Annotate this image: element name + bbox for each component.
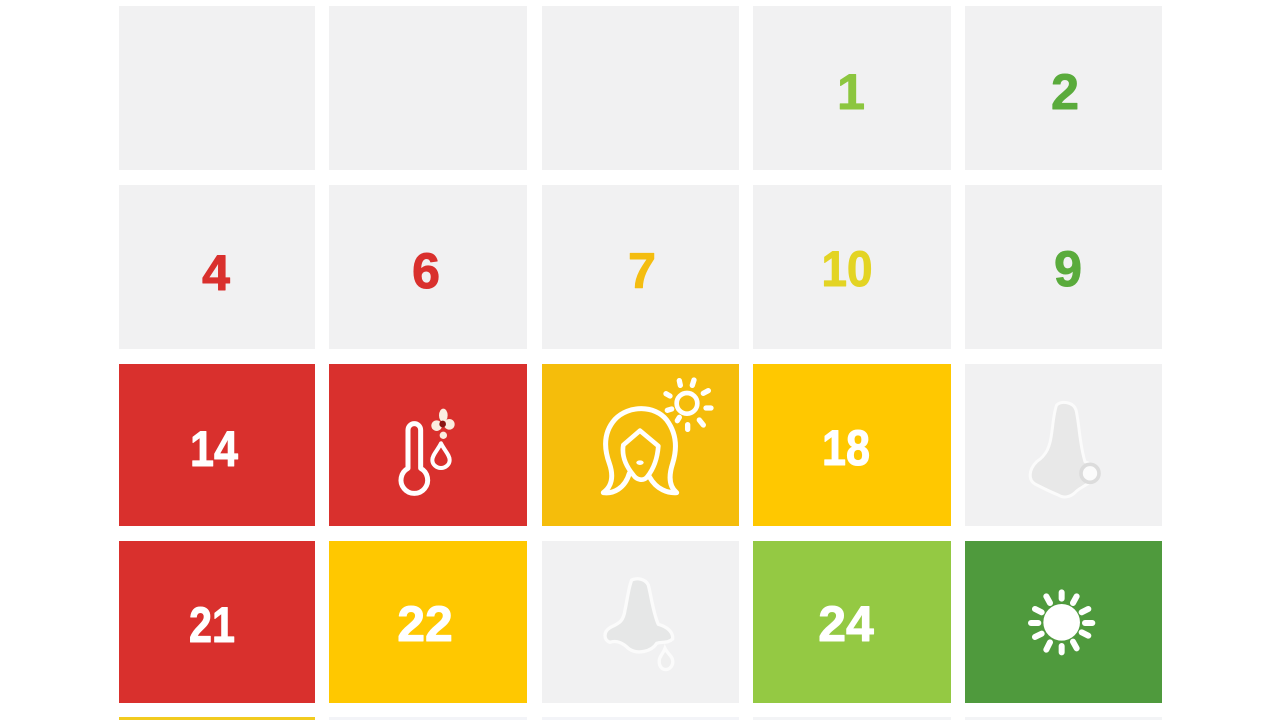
icon: runny nose <box>605 579 673 670</box>
day 14 cell: 14 <box>190 421 238 477</box>
day 10 cell: 10 <box>822 241 872 297</box>
cell: thermometer icon <box>329 364 527 526</box>
icon: nose with ring <box>1030 402 1099 497</box>
day 9 cell <box>965 185 1162 349</box>
icon: sun <box>1031 592 1092 652</box>
day 7 cell <box>542 185 739 349</box>
day 7 cell: 7 <box>628 243 656 299</box>
day 4 cell <box>119 185 315 349</box>
partial cell 4 <box>753 717 951 720</box>
day 21 cell: 21 <box>189 597 235 653</box>
day 6 cell: 6 <box>412 243 440 299</box>
partial cell 5 <box>965 717 1162 720</box>
calendar row 3 <box>119 364 1162 526</box>
partial cell 2 <box>329 717 527 720</box>
cell: sun icon <box>965 541 1162 703</box>
day 21 cell <box>119 541 315 703</box>
day 1 cell <box>753 6 951 170</box>
cell: nose drip icon <box>542 541 739 703</box>
calendar row 4 <box>119 541 1162 703</box>
day 10 cell <box>753 185 951 349</box>
empty cell 3 <box>542 6 739 170</box>
day 18 cell: 18 <box>822 420 870 476</box>
day 22 cell: 22 <box>397 596 453 652</box>
calendar row 1 <box>119 6 1162 170</box>
day 24 cell <box>753 541 951 703</box>
day 18 cell <box>753 364 951 526</box>
icon: woman with sun <box>603 380 711 493</box>
day 22 cell <box>329 541 527 703</box>
cell: nose icon <box>965 364 1162 526</box>
day 2 cell: 2 <box>1051 64 1079 120</box>
cell: woman and sun icon <box>542 364 739 526</box>
partial yellow cell <box>119 717 315 720</box>
empty cell 1 <box>119 6 315 170</box>
day 9 cell: 9 <box>1054 241 1082 297</box>
day 14 cell <box>119 364 315 526</box>
day 6 cell <box>329 185 527 349</box>
icon: thermometer and drop <box>401 409 455 493</box>
partial cell 3 <box>542 717 739 720</box>
calendar row 5 partial <box>119 717 1162 720</box>
calendar row 2 <box>119 185 1162 349</box>
day 2 cell <box>965 6 1162 170</box>
day 1 cell: 1 <box>837 64 865 120</box>
empty cell 2 <box>329 6 527 170</box>
day 4 cell: 4 <box>202 245 230 301</box>
day 24 cell: 24 <box>818 596 874 652</box>
